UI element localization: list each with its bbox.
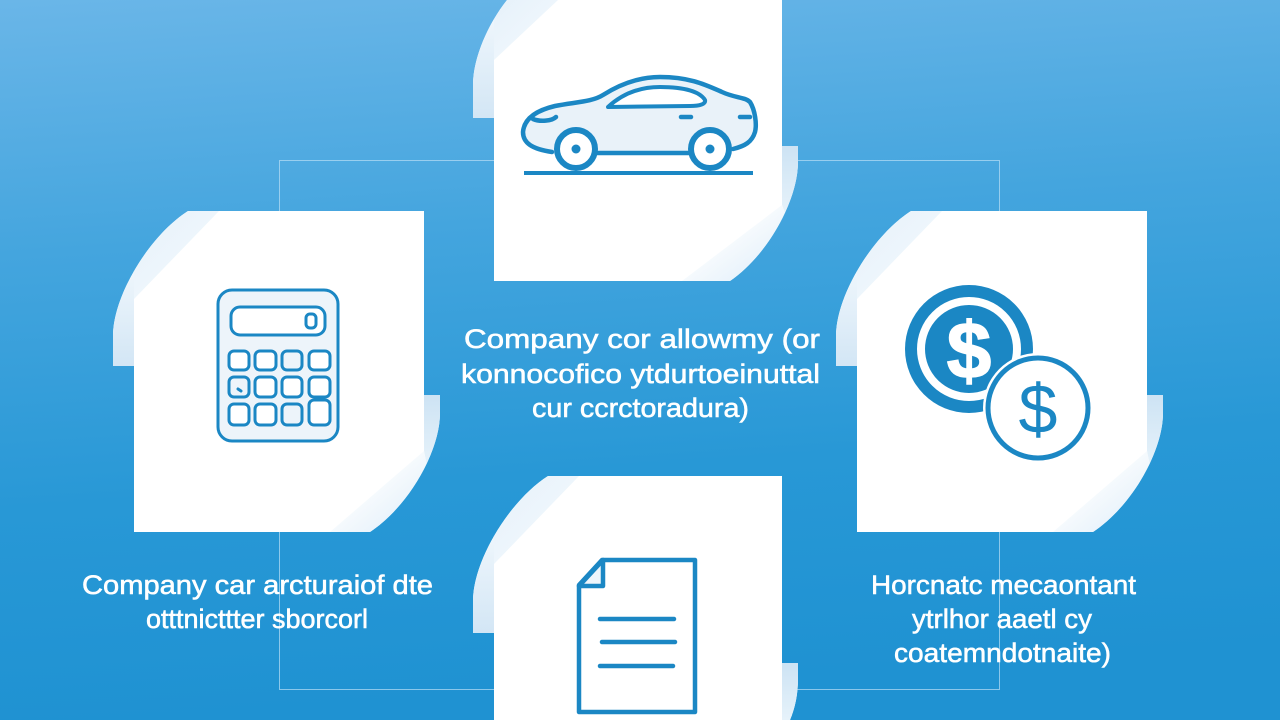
panel: document	[473, 476, 798, 720]
text block: centre: Company cor allowmy (or	[464, 324, 820, 354]
icon: coins: $	[1019, 370, 1057, 448]
text block: centre	[461, 324, 820, 423]
panel: car	[473, 0, 798, 281]
icon: coins: $	[947, 306, 991, 395]
card: coins	[836, 211, 1163, 532]
panel: coins	[836, 211, 1163, 532]
text block: left	[82, 570, 433, 634]
text block: right: Horcnatc mecaontant	[871, 570, 1137, 600]
panel: calculator	[113, 211, 440, 532]
icon: coins	[905, 285, 1093, 463]
text block: right	[871, 570, 1137, 668]
text block: left: otttnicttter sborcorl	[146, 604, 368, 634]
icon: car	[523, 77, 756, 173]
connector frame	[280, 160, 1000, 690]
text block: centre: cur ccrctoradura)	[532, 393, 749, 423]
card: calculator	[113, 211, 440, 532]
text block: centre: konnocofico ytdurtoeinuttal	[461, 359, 820, 389]
text block: left: Company car arcturaiof dte	[82, 570, 433, 600]
card: document	[473, 476, 798, 720]
card: car	[473, 0, 798, 281]
text block: right: ytrlhor aaetl cy	[912, 604, 1093, 634]
icon: calculator	[218, 290, 338, 441]
text block: right: coatemndotnaite)	[894, 638, 1111, 668]
icon: document	[579, 560, 695, 712]
